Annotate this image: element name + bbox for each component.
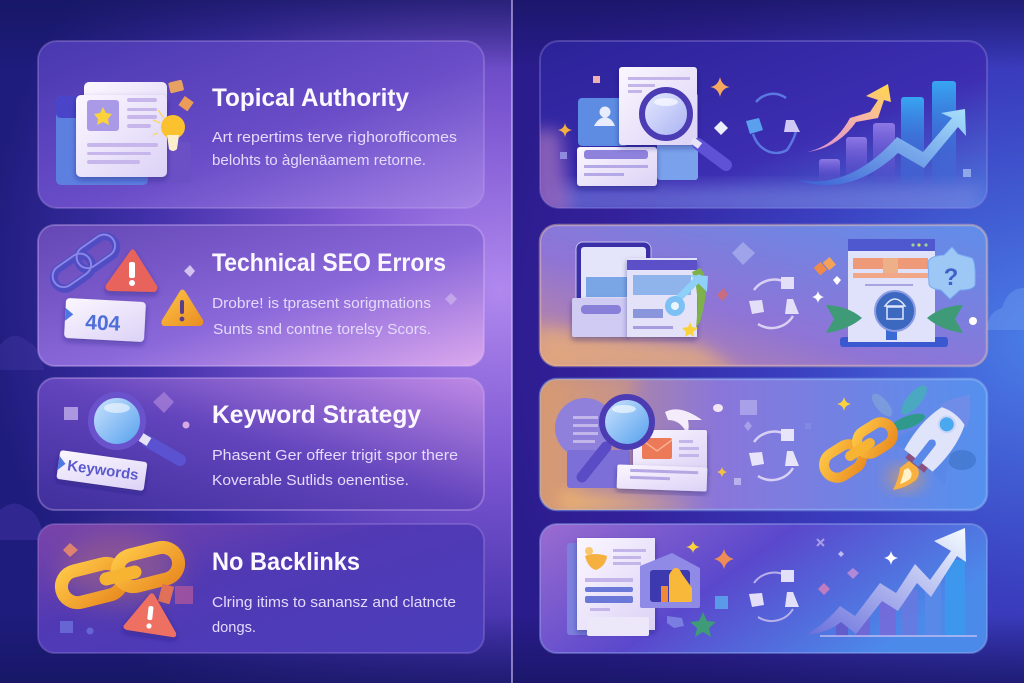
chart: rising bars with arrows — [797, 81, 966, 185]
card: 404: 404 — [85, 311, 121, 336]
panel: no backlinks — [38, 524, 484, 653]
panel: topical authority — [38, 41, 484, 208]
heading: No Backlinks — [212, 548, 360, 576]
icon: cycle arrows — [749, 570, 799, 621]
icon: rocket flame — [887, 460, 923, 490]
icon: webpage with shield and question: ? — [944, 264, 958, 291]
panel: content and rankings growth — [540, 524, 987, 653]
description: Phasent Ger offeer trigit spor there — [212, 447, 458, 464]
panel: fix technical issues — [535, 225, 987, 372]
description: Clring itims to sanansz and clatncte — [212, 594, 456, 611]
icon: rocket — [886, 373, 998, 487]
icon: documents with star and light bulb — [56, 79, 194, 185]
panel: keyword strategy — [38, 378, 484, 510]
heading: Technical SEO Errors — [212, 249, 446, 277]
icon: document with growth card — [567, 538, 716, 637]
description — [212, 594, 456, 636]
chart: rising arrow with bars — [807, 528, 977, 637]
sparkles — [558, 76, 971, 177]
icon: leaves — [868, 382, 976, 470]
icon: gold chain — [819, 418, 897, 483]
icon: cycle arrows — [746, 94, 800, 153]
decorative shapes — [713, 397, 851, 485]
description: Koverable Sutlids oenentise. — [212, 472, 409, 489]
icon: magnifier with envelope cards — [555, 397, 707, 492]
heading: Topical Authority — [212, 84, 409, 112]
panel: technical seo errors — [38, 225, 484, 366]
icon: cycle arrows — [749, 277, 799, 328]
icon: yellow warning triangle — [161, 290, 203, 326]
description — [212, 295, 431, 338]
panel: content audit to growth — [530, 41, 987, 215]
icon: browser windows with wrench — [572, 242, 708, 337]
description: Sunts snd contne torelsy Scors. — [213, 321, 431, 338]
description: belohts to àglenäamem retorne. — [212, 152, 426, 169]
icon: documents with magnifier — [577, 67, 726, 186]
decorative shapes — [717, 242, 977, 325]
decorative shapes — [686, 539, 898, 609]
description — [212, 447, 458, 489]
description — [212, 129, 457, 169]
description: Art repertims terve rìghorofficomes — [212, 129, 457, 146]
panel: outreach and links — [535, 373, 998, 515]
icon: cycle arrows — [749, 429, 799, 480]
tag: keywords: Keywords — [66, 457, 140, 484]
card: 404 — [64, 298, 146, 342]
icon: broken chain — [48, 230, 121, 293]
icon: warning triangle — [123, 584, 193, 637]
icon: red warning triangle — [106, 249, 157, 292]
heading: Keyword Strategy — [212, 401, 421, 429]
description: dongs. — [212, 619, 256, 636]
tag: keywords — [56, 450, 148, 491]
icon: magnifying glass — [91, 395, 180, 460]
icon: gold chain — [58, 544, 182, 606]
description: Drobre! is tprasent sorigmations — [212, 295, 431, 312]
icon: webpage with shield and question — [826, 239, 975, 347]
